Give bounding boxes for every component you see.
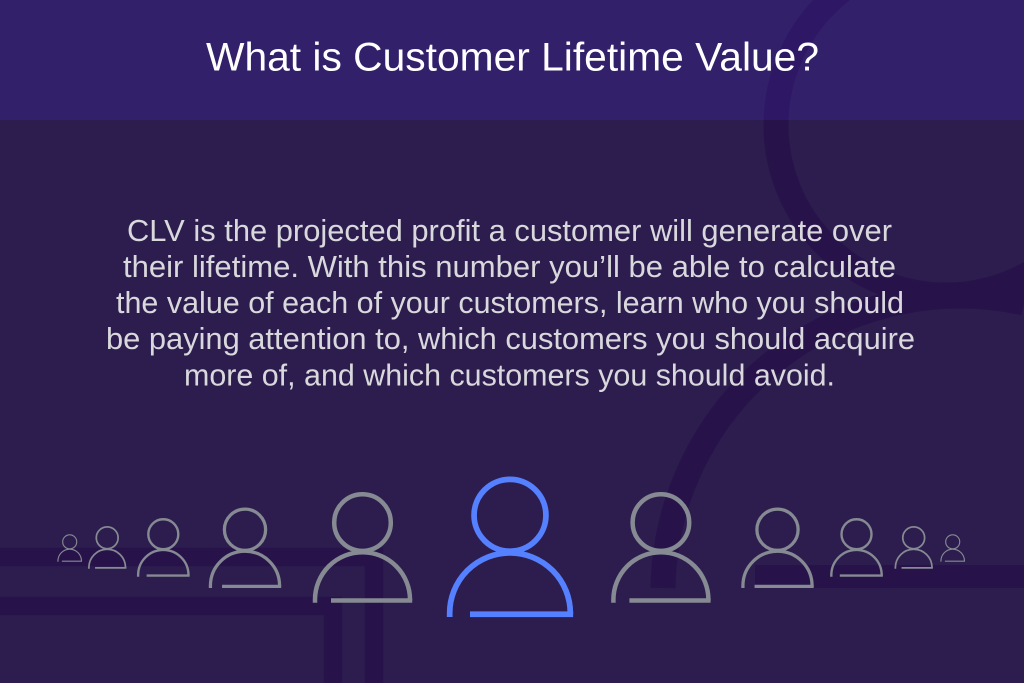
- icon: person right 2: [743, 509, 814, 588]
- text block: CLV definition: CLV is the projected profit a customer will generate over: [127, 213, 892, 248]
- icon: person left 2: [210, 509, 281, 588]
- icon: person right 4: [895, 527, 933, 569]
- panel: header band: [0, 0, 1024, 120]
- icon: person right 3: [831, 519, 883, 577]
- icon: person right 1: [613, 494, 711, 603]
- text block: CLV definition: be paying attention to, which customers you should acquire: [106, 321, 915, 356]
- icon: highlighted blue person: [450, 479, 573, 617]
- text block: CLV definition: their lifetime. With this number you’ll be able to calculate: [123, 249, 896, 284]
- icon: person far left: [58, 535, 82, 562]
- icon: person left 3: [138, 519, 190, 577]
- icon: person left 1: [315, 494, 412, 603]
- text block: CLV definition: the value of each of your customers, learn who you should: [116, 285, 904, 320]
- icon: person left 4: [89, 527, 126, 569]
- text block: CLV definition: [106, 213, 915, 392]
- text block: CLV definition: more of, and which customers you should avoid.: [184, 358, 835, 392]
- row of customer icons: [58, 479, 965, 617]
- icon: person far right: [941, 535, 965, 562]
- title: What is Customer Lifetime Value?: [206, 36, 819, 80]
